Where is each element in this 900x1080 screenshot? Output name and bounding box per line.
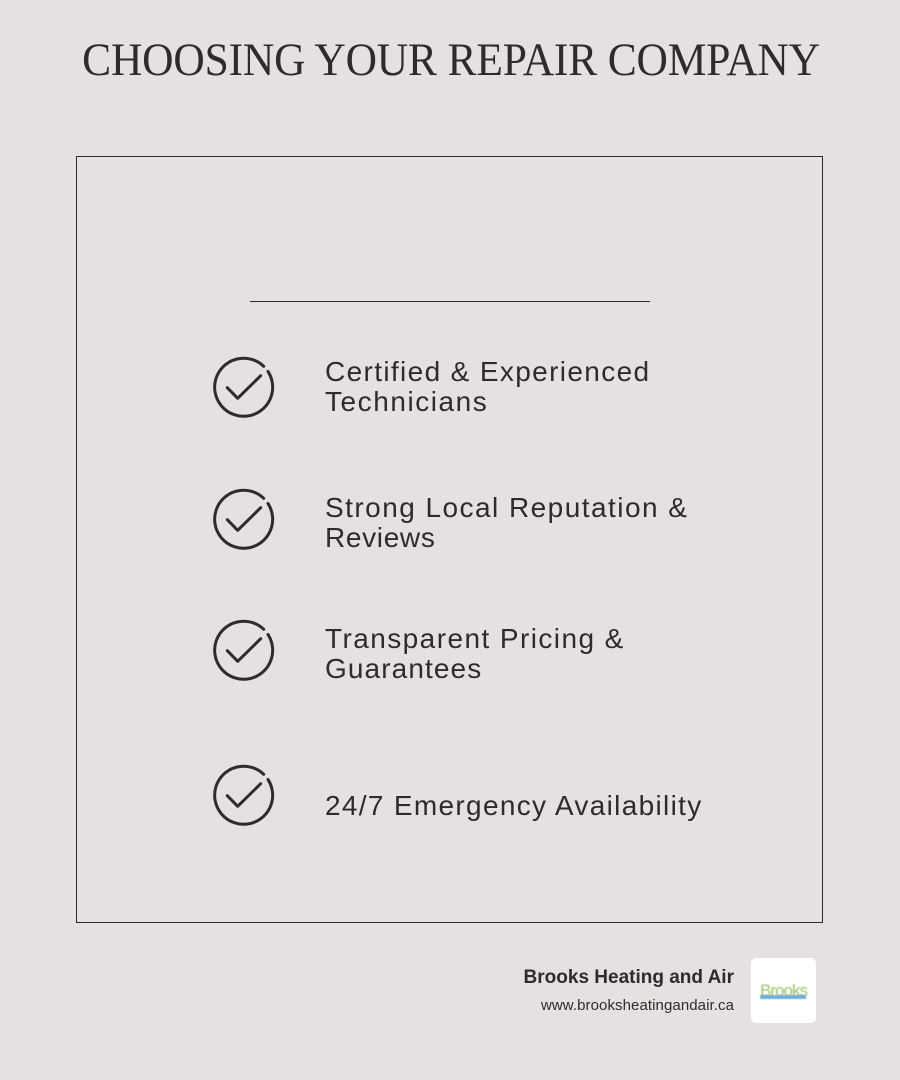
text: certified: [325, 356, 650, 417]
logo wordmark: Brooks: [760, 981, 807, 1000]
icon: check 1: [213, 356, 274, 418]
text: availability: 24/7 Emergency Availability: [325, 790, 703, 821]
text: reputation: Strong Local Reputation &: [325, 492, 688, 523]
website: www.brooksheatingandair.ca: [541, 997, 734, 1014]
text: certified: Certified & Experienced: [325, 356, 650, 387]
divider line: [250, 301, 650, 302]
panel: checklist: [76, 156, 823, 923]
text: pricing: Guarantees: [325, 653, 482, 684]
company name: Brooks Heating and Air: [524, 967, 734, 988]
icon: check 2: [213, 488, 274, 550]
text: reputation: Reviews: [325, 522, 436, 553]
icon: check 3: [213, 620, 274, 681]
logo tagline: [760, 995, 806, 999]
text: pricing: Transparent Pricing &: [325, 623, 625, 654]
title: CHOOSING YOUR REPAIR COMPANY: [82, 34, 820, 86]
text: reputation: [325, 492, 688, 553]
logo: [751, 958, 816, 1023]
icon: check 4: [213, 764, 274, 826]
text: pricing: [325, 623, 625, 684]
text: certified: Technicians: [325, 386, 488, 417]
